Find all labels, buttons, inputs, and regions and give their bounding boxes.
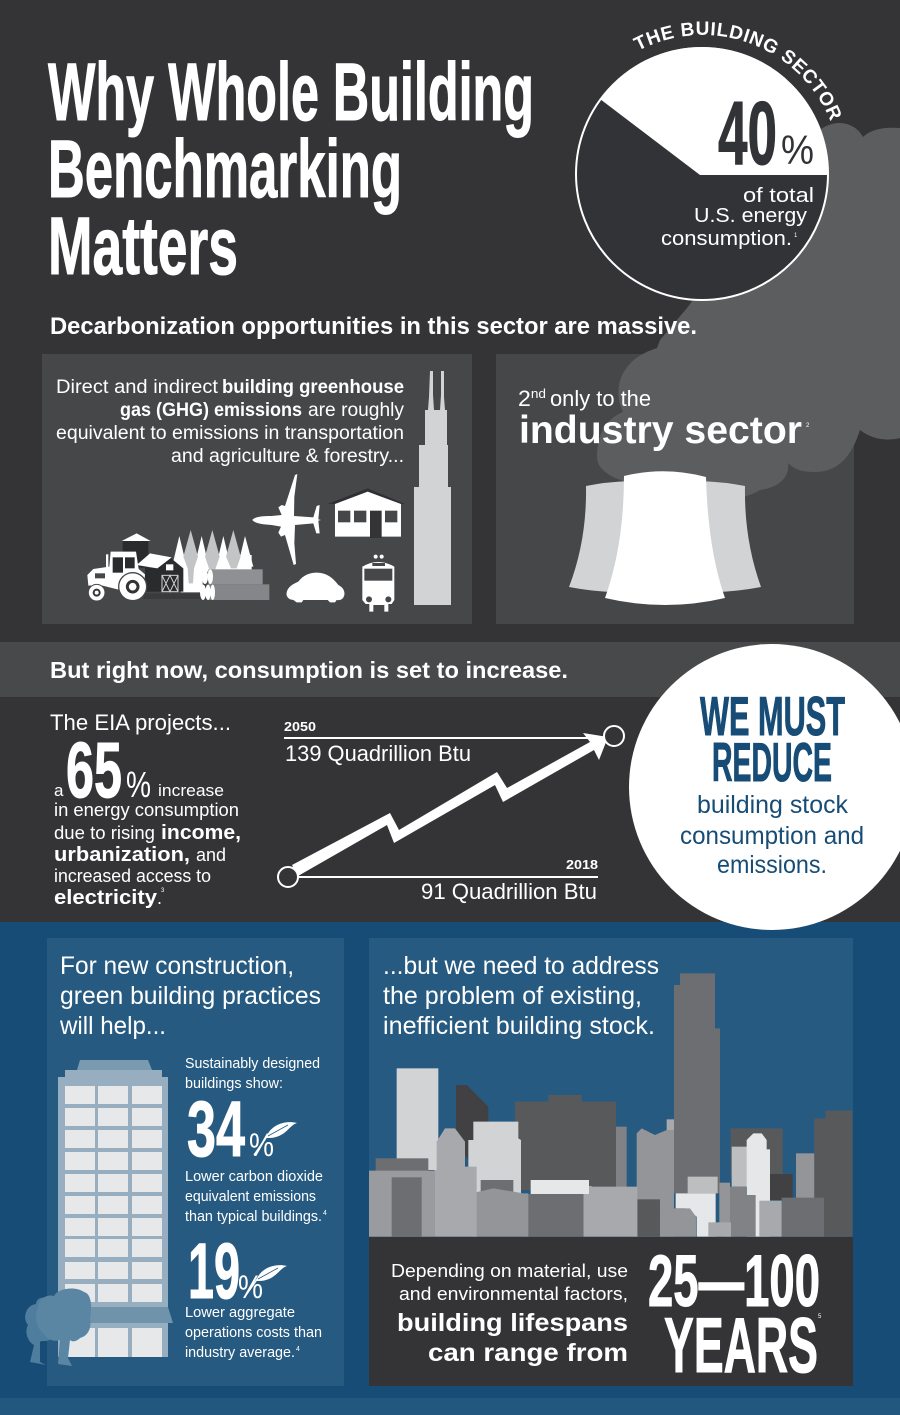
text block: sustainably designed buildings: buildings show: bbox=[185, 1076, 283, 1092]
text block: second only to the industry sector: nd bbox=[531, 386, 546, 401]
arrow: rising consumption bbox=[292, 733, 608, 876]
text block: EIA projection: The EIA projects... bbox=[50, 710, 231, 735]
curved label: THE BUILDING SECTOR bbox=[632, 22, 841, 122]
logs bbox=[143, 569, 269, 600]
pie slice: 40 percent bbox=[600, 47, 828, 175]
icons: airplane, house, car and train bbox=[252, 474, 405, 612]
pie caption bbox=[661, 185, 814, 250]
text block: existing building stock bbox=[383, 952, 659, 1040]
text block: lifespan description bbox=[391, 1261, 628, 1367]
panel: new construction background bbox=[47, 938, 344, 1386]
text block: second only to the industry sector: industry sector bbox=[519, 409, 802, 452]
statistic: 25 to 100 years bbox=[648, 1241, 822, 1389]
statistic: 65 percent: 65 bbox=[66, 725, 122, 814]
illustration: city skyline bbox=[369, 973, 852, 1237]
text block: new construction: green building practices bbox=[60, 982, 321, 1010]
icon: green office building bbox=[58, 1060, 173, 1357]
text block: EIA projection: in energy consumption bbox=[54, 800, 239, 820]
callout: we must reduce: building stock bbox=[697, 791, 848, 819]
text block: existing building stock: ...but we need to address bbox=[383, 952, 659, 980]
statistic: 34 percent: % bbox=[249, 1127, 274, 1163]
text block: EIA projection: . bbox=[157, 888, 162, 908]
text block: existing building stock: inefficient building stock. bbox=[383, 1012, 655, 1040]
title bbox=[48, 47, 534, 292]
pie caption: U.S. energy bbox=[694, 205, 807, 227]
pie caption: 1 bbox=[794, 233, 798, 239]
text block: emissions equivalence: and agriculture & forestry... bbox=[171, 446, 404, 467]
text block: lower operations costs: operations costs than bbox=[185, 1325, 322, 1341]
icon: house bbox=[328, 488, 405, 538]
text block: new construction bbox=[59, 952, 321, 1040]
title: Why Whole Building bbox=[48, 47, 534, 138]
text block: sustainably designed buildings: Sustainably designed bbox=[185, 1056, 320, 1072]
pie caption: of total bbox=[743, 185, 814, 207]
trees bbox=[172, 530, 253, 592]
text block: emissions equivalence: gas (GHG) emissions bbox=[120, 400, 302, 421]
callout: we must reduce: consumption and bbox=[680, 822, 864, 850]
text block: lifespan description: building lifespans bbox=[397, 1309, 628, 1337]
callout: we must reduce: emissions. bbox=[717, 851, 827, 879]
statistic: 65 percent: % bbox=[126, 764, 151, 805]
band: consumption heading bbox=[0, 642, 900, 697]
label: 2050: 139 Quadrillion Btu bbox=[285, 741, 471, 766]
text block: emissions equivalence: building greenhouse bbox=[222, 377, 404, 398]
icon: leaf bbox=[254, 1122, 297, 1155]
text block: EIA projection: increase bbox=[158, 781, 224, 800]
text block: lower operations costs: industry average. bbox=[185, 1345, 295, 1361]
heading: decarbonization: Decarbonization opportunities in this sector are massive. bbox=[50, 313, 697, 340]
statistic: 19 percent: 19 bbox=[188, 1226, 240, 1315]
text block: second only to the industry sector: 2 bbox=[806, 423, 810, 429]
silo bbox=[122, 533, 151, 568]
pie caption: consumption. bbox=[661, 228, 792, 250]
text block: EIA projection: income, bbox=[161, 822, 241, 844]
pie chart: building sector 40 percent bbox=[575, 22, 841, 301]
text block: EIA projection bbox=[50, 710, 241, 909]
text block: lifespan description: and environmental factors, bbox=[399, 1284, 628, 1304]
text block: second only to the industry sector bbox=[518, 386, 810, 452]
panel: industry sector background bbox=[496, 354, 854, 624]
panel: existing building stock background bbox=[369, 938, 853, 1237]
label: 2018: 91 Quadrillion Btu bbox=[421, 879, 597, 904]
text block: emissions equivalence bbox=[56, 377, 404, 467]
barn bbox=[137, 553, 183, 592]
text block: lifespan description: Depending on material, use bbox=[391, 1261, 628, 1281]
chart: energy consumption rising from 2018 to 2050 bbox=[278, 719, 624, 904]
text block: lower carbon dioxide: 4 bbox=[323, 1210, 327, 1217]
title: Matters bbox=[48, 201, 238, 292]
text block: EIA projection: 3 bbox=[161, 888, 165, 894]
text block: new construction: will help... bbox=[59, 1012, 166, 1040]
icon: farm scene with tractor, silo, barn, trees and logs bbox=[87, 530, 269, 601]
heading: consumption set to increase: But right now, consumption is set to increase. bbox=[50, 657, 568, 683]
text block: EIA projection: and bbox=[196, 845, 226, 865]
text block: EIA projection: urbanization, bbox=[54, 844, 190, 866]
icon: tree bbox=[25, 1289, 91, 1366]
text block: EIA projection: increased access to bbox=[54, 866, 211, 886]
tractor bbox=[87, 552, 147, 601]
panel: building lifespans bbox=[369, 1237, 853, 1389]
icon: airplane bbox=[252, 474, 321, 565]
label: 2018 bbox=[421, 857, 598, 904]
icon: skyscraper bbox=[414, 371, 451, 605]
text block: lower operations costs bbox=[185, 1305, 322, 1361]
statistic: 34 percent: 34 bbox=[187, 1084, 245, 1173]
panel: building greenhouse gas emissions background bbox=[42, 354, 472, 624]
text block: emissions equivalence: equivalent to emissions in transportation bbox=[56, 423, 404, 444]
text block: lower operations costs: 4 bbox=[296, 1346, 300, 1353]
text block: lower carbon dioxide: than typical buildings. bbox=[185, 1209, 322, 1225]
text block: existing building stock: the problem of existing, bbox=[383, 982, 642, 1010]
icon: car bbox=[287, 573, 344, 602]
text block: emissions equivalence: Direct and indirect bbox=[56, 377, 219, 398]
icon: leaf bbox=[244, 1265, 287, 1298]
text block: EIA projection: electricity bbox=[54, 887, 158, 909]
label: 2050: 2050 bbox=[284, 719, 316, 734]
text block: lower operations costs: Lower aggregate bbox=[185, 1305, 295, 1321]
text block: emissions equivalence: are roughly bbox=[308, 400, 404, 421]
icon: cooling towers bbox=[569, 471, 761, 605]
text block: second only to the industry sector: 2 bbox=[518, 386, 530, 411]
text block: lifespan description: can range from bbox=[428, 1339, 628, 1367]
text block: lower carbon dioxide: equivalent emissions bbox=[185, 1189, 316, 1205]
text block: second only to the industry sector: only to the bbox=[550, 386, 651, 411]
title: Benchmarking bbox=[48, 124, 402, 215]
statistic: 25 to 100 years: 5 bbox=[818, 1314, 822, 1320]
40 percent figure: % bbox=[781, 127, 814, 173]
label: 2050 bbox=[284, 719, 471, 766]
label: 2018: 2018 bbox=[566, 857, 598, 872]
text block: new construction: For new construction, bbox=[60, 952, 294, 980]
text block: lower carbon dioxide: Lower carbon dioxide bbox=[185, 1169, 323, 1185]
text block: sustainably designed buildings bbox=[185, 1056, 320, 1092]
text block: lower carbon dioxide bbox=[185, 1169, 327, 1225]
statistic: 19 percent: % bbox=[238, 1269, 263, 1305]
40 percent figure: 40 bbox=[718, 84, 777, 184]
text block: EIA projection: a bbox=[54, 781, 64, 800]
text block: EIA projection: due to rising bbox=[54, 823, 155, 843]
callout: we must reduce bbox=[629, 644, 900, 930]
icon: train bbox=[362, 555, 394, 612]
smoke cloud bbox=[597, 123, 900, 498]
